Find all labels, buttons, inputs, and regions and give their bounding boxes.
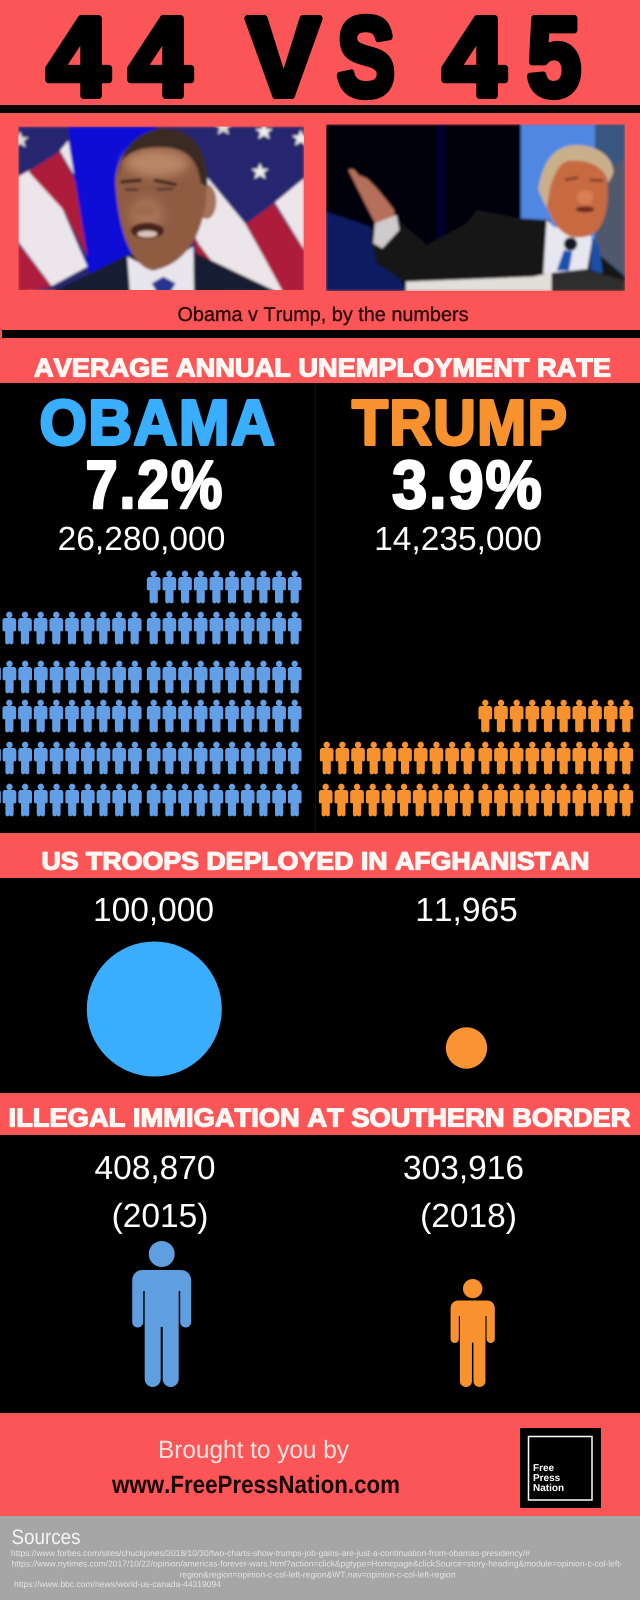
circle: Obama troops [87, 942, 222, 1076]
panel: immigration heading band [0, 1093, 640, 1135]
icon: blue person [132, 1241, 191, 1387]
panel: sources [0, 1516, 640, 1600]
panel: unemployment comparison [0, 383, 640, 833]
panel: immigration comparison [0, 1135, 640, 1413]
panel: troops comparison [0, 878, 640, 1093]
heading: unemployment: AVERAGE ANNUAL UNEMPLOYMENT RATE [34, 352, 611, 382]
heading: troops: US TROOPS DEPLOYED IN AFGHANISTAN [42, 848, 590, 876]
source links [11, 1548, 623, 1589]
website: www.FreePressNation.com [111, 1471, 400, 1499]
icon: orange person [451, 1279, 495, 1387]
pictogram: Trump unemployed people [319, 700, 633, 816]
logo: Free [533, 1463, 555, 1474]
Trump troop number: 11,965 [415, 892, 518, 929]
Obama troop number: 100,000 [93, 892, 214, 929]
Obama column [0, 386, 301, 816]
panel: credit footer [0, 1413, 640, 1516]
source links: https://www.nytimes.com/2017/10/22/opinion/americas-forever-wars.html?action=click&pgtype=Homepage&clickSource=story-heading&module=opinion-c-col-left- [12, 1559, 623, 1569]
Trump rate: 3.9% [392, 447, 544, 523]
Trump label: TRUMP [352, 386, 568, 458]
panel: header [0, 0, 640, 383]
caption: Obama v Trump, by the numbers [178, 304, 468, 326]
panel: troops heading band [0, 833, 640, 878]
Trump border year: (2018) [420, 1198, 517, 1235]
Obama border year: (2015) [112, 1198, 208, 1235]
Obama unemployed count: 26,280,000 [58, 521, 225, 558]
logo: Nation [533, 1483, 564, 1494]
logo: Press [533, 1473, 561, 1484]
sources heading: Sources [12, 1526, 80, 1549]
pictogram: Obama unemployed people [0, 571, 301, 816]
Trump border number: 303,916 [403, 1150, 524, 1187]
source links: https://www.forbes.com/sites/chuckjones/2018/10/30/two-charts-show-trumps-job-gains-are-just-a-continuation-from-obamas-presidency/# [11, 1548, 530, 1558]
Obama border number: 408,870 [94, 1150, 216, 1187]
Trump column [319, 386, 633, 816]
photo: Obama speaking in front of flags [11, 119, 309, 292]
logo [520, 1428, 601, 1508]
credit line: Brought to you by [158, 1436, 349, 1464]
source links: region&region=opinion-c-col-left-region&WT.nav=opinion-c-col-left-region [180, 1570, 456, 1580]
source links: https://www.bbc.com/news/world-us-canada-44319094 [14, 1579, 221, 1589]
Obama label: OBAMA [40, 386, 276, 458]
heading: immigration: ILLEGAL IMMIGATION AT SOUTHERN BORDER [8, 1102, 631, 1132]
photo: Trump gesturing at podium [326, 124, 625, 291]
circle: Trump troops [446, 1027, 487, 1069]
Obama rate: 7.2% [86, 447, 224, 523]
Trump unemployed count: 14,235,000 [374, 521, 542, 558]
